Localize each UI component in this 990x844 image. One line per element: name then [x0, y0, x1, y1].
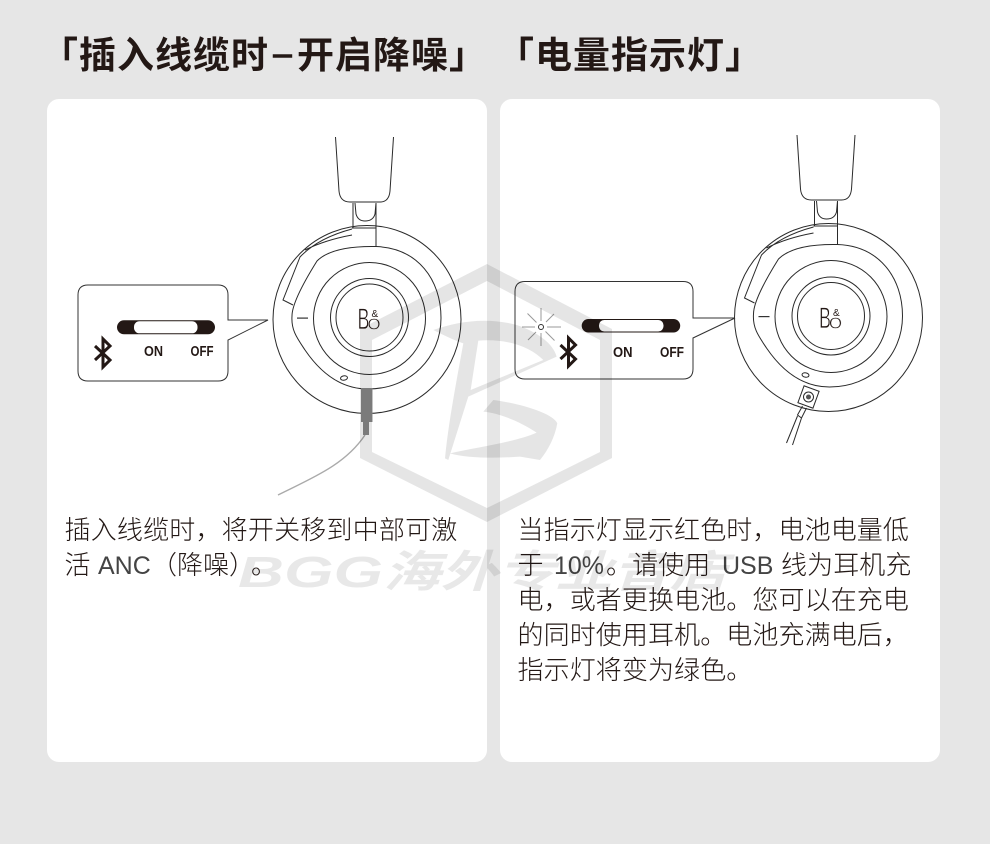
- inner contour: [753, 244, 902, 387]
- left description text: 活: [64, 550, 91, 580]
- right description text: USB: [722, 552, 773, 580]
- yoke: [352, 203, 376, 247]
- left description text: 插入线缆时，将开关移到中部可激: [64, 515, 458, 545]
- side strip: [283, 229, 352, 305]
- right description text: 10%: [554, 552, 604, 580]
- B&O logo: &: [833, 308, 840, 319]
- B&O logo: O: [368, 316, 380, 334]
- watermark: brush B: [433, 321, 557, 460]
- title: insert cable, enable noise cancelling: 开启降噪」: [297, 35, 487, 76]
- watermark: brand text: [238, 548, 736, 597]
- ON label: ON: [144, 344, 163, 360]
- slider: [582, 319, 680, 332]
- headband: [336, 137, 394, 202]
- B&O logo: O: [829, 316, 842, 332]
- title: insert cable, enable noise cancelling: [41, 35, 487, 76]
- side strip: [744, 227, 814, 303]
- left description text: ANC: [98, 552, 151, 580]
- bluetooth icon: [560, 338, 576, 366]
- right headphone illustration: [734, 135, 922, 445]
- bluetooth icon: [95, 339, 110, 367]
- watermark: brand text: 海外专业音店: [383, 548, 736, 597]
- inner contour: [292, 246, 441, 389]
- title: insert cable, enable noise cancelling: 「插入线缆时: [41, 35, 269, 76]
- left callout: switch in middle position: [78, 285, 268, 381]
- watermark: brand text: BGG: [238, 548, 383, 597]
- left description text: 。: [251, 550, 277, 580]
- headband: [797, 135, 855, 200]
- left headphone illustration: [273, 137, 461, 495]
- left description text: [64, 515, 458, 580]
- OFF label: OFF: [660, 345, 684, 361]
- right description text: 指示灯将变为绿色。: [518, 655, 752, 685]
- outer ear cup: [734, 224, 922, 412]
- OFF label: OFF: [190, 344, 214, 360]
- indicator light sparkle: [522, 308, 561, 346]
- minus mark: [297, 318, 308, 319]
- right description text: [518, 515, 912, 685]
- right description text: 电，或者更换电池。您可以在充电: [518, 585, 909, 615]
- slider: [117, 320, 215, 334]
- title: insert cable, enable noise cancelling: –: [272, 38, 293, 71]
- B&O logo: &: [372, 309, 378, 320]
- LED: [802, 372, 809, 378]
- title: battery indicator: 「电量指示灯」: [497, 35, 763, 76]
- watermark: hexagon logo: [360, 264, 612, 522]
- LED: [340, 375, 348, 381]
- right description text: 于: [518, 550, 544, 580]
- B&O logo: B: [819, 302, 831, 335]
- minus mark: [758, 316, 770, 317]
- rings: [775, 260, 887, 372]
- right description text: 的同时使用耳机。电池充满电后，: [518, 620, 909, 650]
- yoke: [814, 201, 838, 245]
- outer ear cup: [273, 226, 461, 414]
- right description text: 。请使用: [606, 550, 710, 580]
- panel: right card: [500, 99, 940, 762]
- ON label: ON: [613, 345, 632, 361]
- USB connector and cable: [786, 386, 819, 445]
- B&O logo: B: [358, 303, 370, 336]
- left description text: （降噪）: [151, 550, 255, 580]
- panel: left card: [47, 99, 487, 762]
- right description text: 线为耳机充: [781, 550, 912, 580]
- right description text: 当指示灯显示红色时，电池电量低: [518, 515, 909, 545]
- rings: [314, 262, 426, 374]
- audio jack and cable: [278, 388, 372, 495]
- right callout: indicator light and switch: [515, 282, 735, 379]
